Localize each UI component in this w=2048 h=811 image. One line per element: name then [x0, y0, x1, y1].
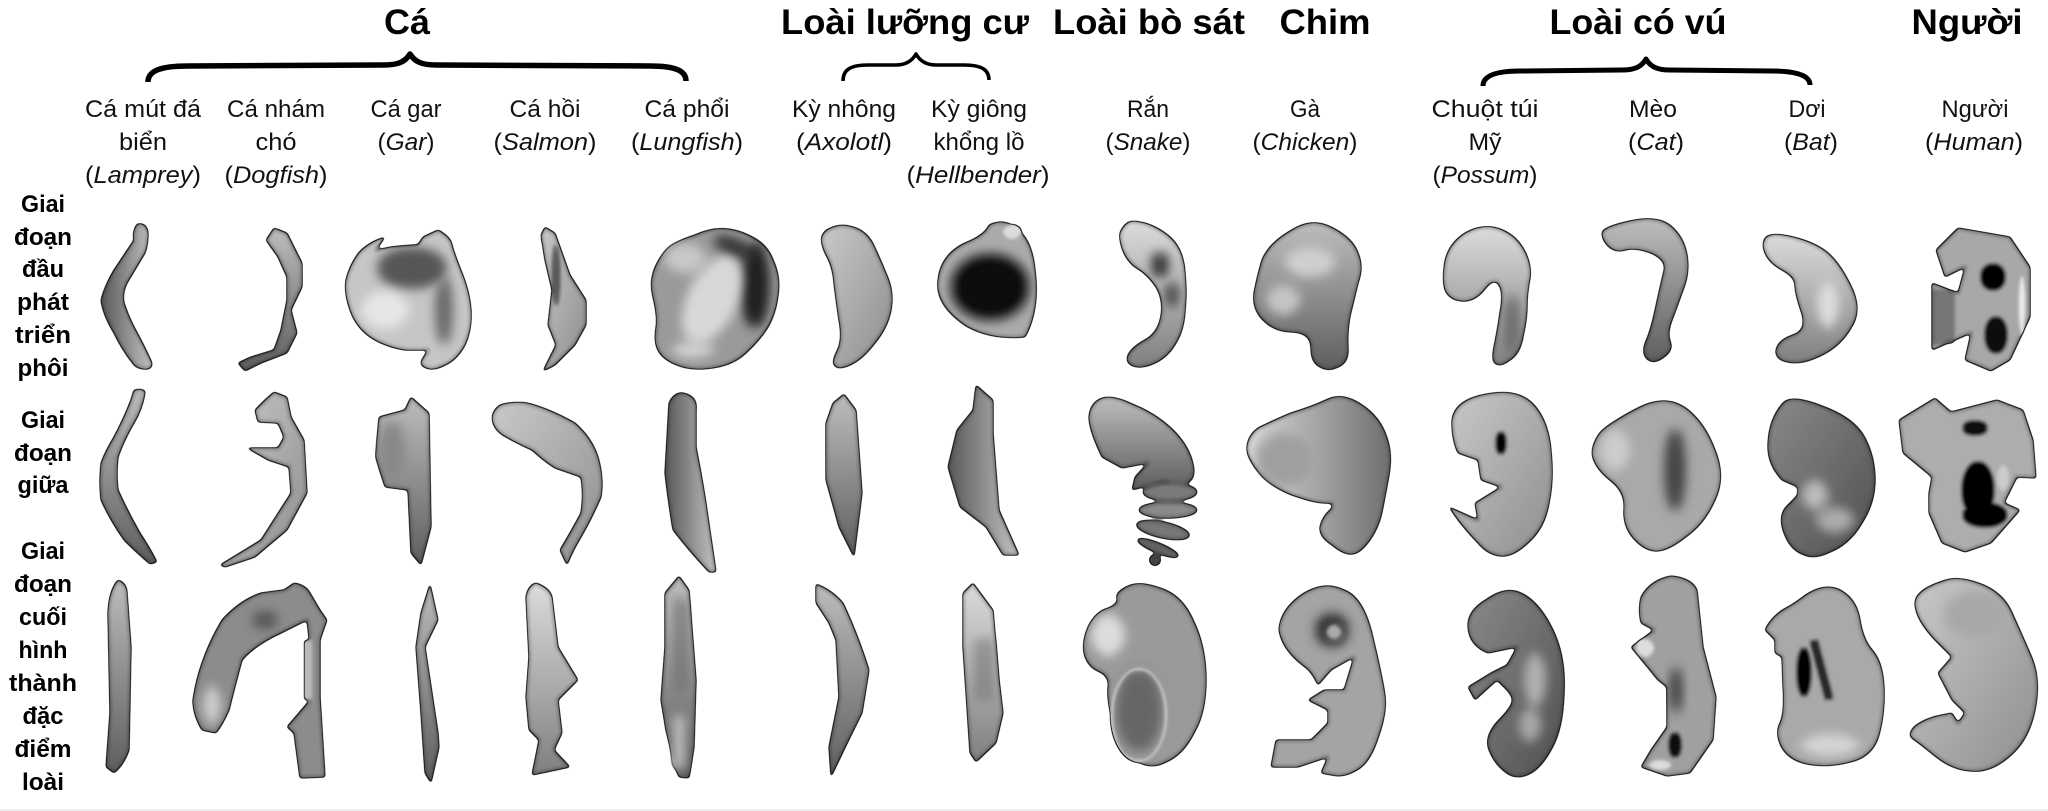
species label: gar: Cá gar [370, 96, 442, 123]
species label: dogfish: chó [256, 129, 296, 156]
embryo: chicken late [1271, 586, 1385, 776]
row label: late stage: hình [18, 637, 68, 664]
embryo: gar early [346, 230, 471, 369]
embryo: cat middle [1592, 401, 1720, 551]
embryo: bat early [1763, 234, 1857, 363]
embryo: axolotl early [822, 225, 892, 368]
species label: bat [1784, 96, 1838, 156]
embryo: snake early [1120, 221, 1186, 367]
row label: late stage: loài [22, 769, 64, 796]
heading: Loài lưỡng cư: Loài lưỡng cư [781, 3, 1030, 42]
species label: snake: (Snake) [1106, 129, 1190, 156]
embryo: gar middle [376, 397, 431, 565]
species label: dogfish: Cá nhám [227, 96, 325, 123]
embryo: salmon early [541, 227, 586, 371]
species label: human: (Human) [1925, 129, 2023, 156]
embryo: cat early [1602, 219, 1688, 362]
row label: late stage: Giai [21, 538, 65, 565]
row label: middle stage: Giai [21, 407, 65, 434]
embryo: human late [1910, 579, 2037, 771]
embryo: lungfish early [651, 229, 779, 369]
species label: lungfish: (Lungfish) [631, 129, 743, 156]
embryo: lamprey late [106, 580, 131, 773]
species label: hellbender: khổng lồ [934, 129, 1024, 156]
species label: axolotl: Kỳ nhông [792, 96, 896, 123]
row label: early stage [14, 191, 72, 382]
embryo: possum late [1468, 590, 1564, 777]
embryo: snake middle [1089, 397, 1197, 566]
brace: amphibian group [843, 54, 989, 81]
embryo: bat middle [1768, 399, 1875, 557]
species label: dogfish [224, 96, 328, 189]
species label: gar [370, 96, 442, 156]
species label: snake [1106, 96, 1190, 156]
species label: lamprey: Cá mút đá [85, 96, 202, 123]
heading: Chim: Chim [1280, 3, 1370, 42]
row label: middle stage: giữa [18, 472, 69, 499]
embryo: axolotl middle [826, 394, 862, 557]
row label: late stage: đoạn [14, 571, 72, 598]
row label: early stage: đầu [22, 256, 64, 283]
embryo: dogfish early [238, 228, 302, 371]
embryo: salmon middle [492, 402, 602, 565]
species label: hellbender: (Hellbender ) [906, 162, 1050, 189]
species label: dogfish: (Dogfish) [224, 162, 328, 189]
species label: cat: Mèo [1629, 96, 1677, 123]
species label: lamprey: (Lamprey) [85, 162, 201, 189]
row label: early stage: phôi [18, 355, 68, 382]
heading: Cá: Cá [384, 3, 431, 42]
row label: early stage: triển [15, 322, 71, 349]
embryo: possum early [1444, 227, 1530, 365]
species label: salmon: Cá hồi [510, 96, 580, 123]
row label: late stage [9, 538, 77, 796]
species label: hellbender [906, 96, 1050, 189]
row label: early stage: phát [17, 289, 69, 316]
species label: bat: Dơi [1788, 96, 1826, 123]
brace: fish group [148, 54, 686, 82]
embryo: chicken early [1254, 223, 1361, 370]
species label: axolotl [792, 96, 896, 156]
species label: chicken [1252, 96, 1357, 156]
row label: middle stage: đoạn [14, 440, 72, 467]
embryo: bat late [1765, 587, 1884, 766]
row label: late stage: điểm [14, 736, 72, 763]
species label: cat [1628, 96, 1684, 156]
embryo: axolotl late [816, 584, 869, 777]
embryo: snake late [1084, 584, 1206, 766]
embryo: human middle [1899, 398, 2036, 552]
species label: possum: (Possum) [1432, 162, 1538, 189]
species label: human [1925, 96, 2023, 156]
row label: late stage: cuối [19, 604, 67, 631]
row label: early stage: Giai [21, 191, 65, 218]
embryo: lungfish late [661, 576, 696, 778]
species label: snake: Rắn [1127, 96, 1169, 123]
species label: salmon [494, 96, 596, 156]
embryo: lungfish middle [665, 393, 716, 572]
species label: gar: (Gar) [378, 129, 434, 156]
species label: chicken: (Chicken) [1252, 129, 1357, 156]
row label: middle stage [14, 407, 72, 499]
species label: salmon: (Salmon) [494, 129, 596, 156]
species label: lamprey [85, 96, 202, 189]
embryo: human early [1932, 228, 2030, 371]
embryo: lamprey middle [100, 389, 157, 564]
embryo: salmon late [526, 583, 578, 775]
embryo: hellbender late [963, 583, 1003, 762]
species label: axolotl: (Axolotl ) [796, 129, 892, 156]
species label: cat: (Cat) [1628, 129, 1684, 156]
heading: Người: Người [1912, 3, 2022, 42]
species label: possum: Chuột túi [1432, 96, 1538, 123]
embryo: hellbender middle [948, 385, 1019, 555]
species label: possum: Mỹ [1468, 129, 1502, 156]
species label: lamprey: biển [119, 129, 167, 156]
row label: early stage: đoạn [14, 224, 72, 251]
faint bottom edge [0, 809, 2048, 811]
species label: lungfish: Cá phổi [644, 96, 730, 123]
row label: late stage: đặc [22, 703, 64, 730]
species label: human: Người [1942, 96, 2008, 123]
species label: lungfish [631, 96, 743, 156]
embryo: dogfish late [193, 583, 327, 778]
species label: bat: (Bat) [1784, 129, 1838, 156]
brace: mammal group [1483, 59, 1810, 86]
embryo: chicken middle [1247, 397, 1390, 554]
heading: Loài bò sát: Loài bò sát [1053, 3, 1245, 42]
embryo: cat late [1631, 576, 1716, 776]
species label: chicken: Gà [1290, 96, 1321, 123]
embryo: dogfish middle [220, 392, 307, 567]
embryo: gar late [416, 584, 439, 783]
embryo: hellbender early [938, 222, 1036, 338]
species label: possum [1432, 96, 1538, 189]
row label: late stage: thành [9, 670, 77, 697]
species label: hellbender: Kỳ giông [931, 96, 1027, 123]
heading: Loài có vú: Loài có vú [1550, 3, 1726, 42]
embryo: possum middle [1449, 392, 1552, 556]
embryo: lamprey early [101, 224, 152, 369]
